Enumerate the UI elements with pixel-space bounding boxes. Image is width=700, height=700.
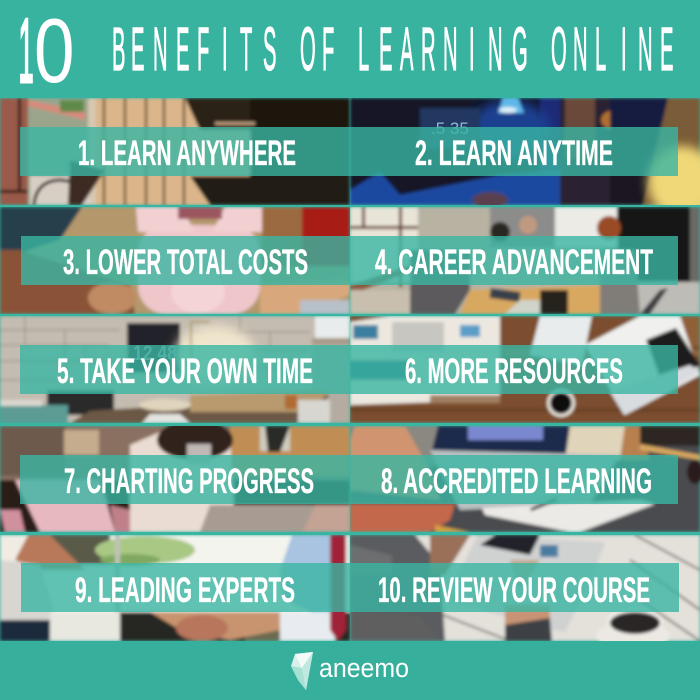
clock digits: 12 48 bbox=[133, 342, 177, 365]
label: leading experts: 9. LEADING EXPERTS bbox=[75, 571, 295, 610]
icon: faceted gem bbox=[291, 652, 313, 690]
photo: desk and brick wall bbox=[0, 316, 350, 423]
banner: 4 bbox=[350, 236, 678, 285]
clock digits: .5 35 bbox=[431, 119, 469, 138]
photo: cafe interior bbox=[0, 98, 350, 205]
banner: 8 bbox=[350, 455, 678, 504]
panel: 4 career advancement bbox=[350, 207, 700, 314]
panel: 8 accredited learning bbox=[350, 426, 700, 532]
banner: 3 bbox=[21, 236, 350, 285]
panel: 9 leading experts bbox=[0, 535, 350, 641]
label: lower total costs: 3. LOWER TOTAL COSTS bbox=[63, 243, 308, 282]
panel: 7 charting progress bbox=[0, 420, 350, 532]
label: learn anywhere: 1. LEARN ANYWHERE bbox=[78, 134, 296, 173]
banner: 1 bbox=[20, 127, 350, 176]
panel: 3 lower total costs bbox=[0, 207, 350, 314]
label: take your own time: 5. TAKE YOUR OWN TIME bbox=[57, 352, 313, 391]
photo: tablet and coffee bbox=[350, 535, 700, 651]
logo: aneemo bbox=[291, 652, 409, 690]
photo: laptop and notebook bbox=[350, 426, 700, 532]
panel: 6 more resources bbox=[350, 316, 700, 423]
title number: 0 bbox=[34, 0, 74, 102]
panel: 10 review your course bbox=[350, 535, 700, 651]
banner: 6 bbox=[350, 345, 678, 394]
title number: 1 bbox=[18, 1, 34, 102]
banner: 5 bbox=[20, 345, 350, 394]
photo: woman with laptop bbox=[0, 420, 350, 532]
panel: 2 learn anytime bbox=[350, 98, 700, 205]
banner: 7 bbox=[20, 455, 350, 504]
title text: BENEFITS OF LEARNING ONLINE bbox=[112, 15, 673, 83]
divider line row 4 bbox=[0, 532, 700, 535]
photo: dark blue room bbox=[350, 98, 700, 205]
divider line row 3 bbox=[0, 423, 700, 426]
divider line row 1 bbox=[0, 205, 700, 207]
photo: documents on wooden table bbox=[350, 316, 700, 423]
photo: piggy bank bbox=[0, 207, 350, 314]
banner: 9 bbox=[21, 563, 350, 612]
divider line row 2 bbox=[0, 314, 700, 316]
banner: 10 bbox=[350, 563, 679, 612]
footer bar bbox=[0, 641, 700, 700]
panel: 5 take your own time bbox=[0, 316, 350, 423]
title bbox=[18, 0, 673, 102]
photo: handshake bbox=[0, 535, 350, 641]
label: charting progress: 7. CHARTING PROGRESS bbox=[64, 462, 314, 501]
panel: 1 learn anywhere bbox=[0, 98, 350, 205]
banner: 2 bbox=[350, 127, 678, 176]
photo: meeting room bbox=[350, 207, 700, 314]
wordmark: aneemo bbox=[319, 653, 409, 683]
